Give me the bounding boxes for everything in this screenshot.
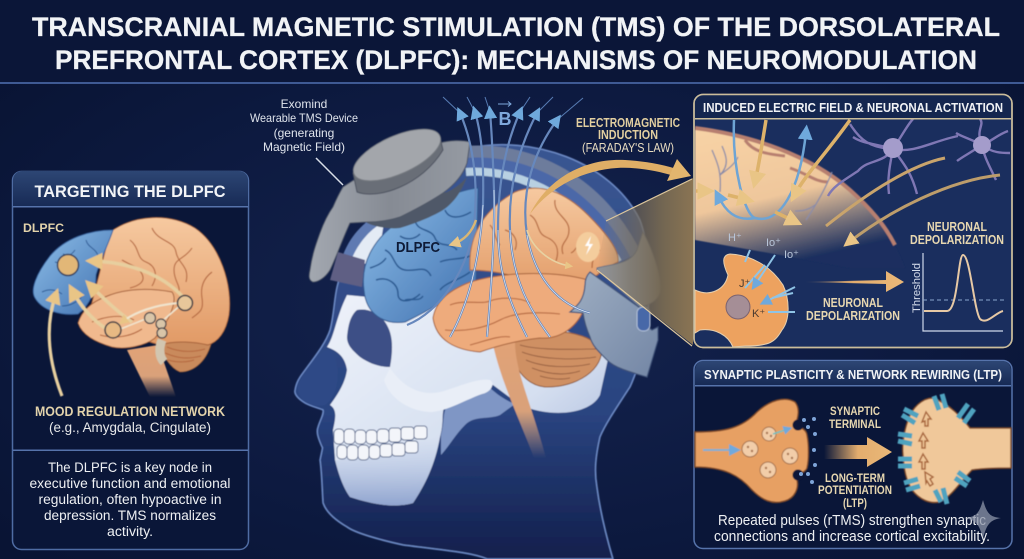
graph label: DEPOLARIZATION — [910, 233, 1004, 247]
device label: Wearable TMS Device — [250, 111, 358, 125]
device label — [250, 97, 358, 185]
action potential chart — [911, 253, 1004, 331]
network caption: (e.g., Amygdala, Cingulate) — [49, 420, 211, 435]
left brain illustration — [33, 218, 230, 397]
eye socket — [347, 310, 392, 367]
B vector label: B — [498, 109, 512, 129]
LTP arrow — [824, 437, 892, 467]
cell with ion channels: Io⁺ — [766, 237, 781, 249]
cortex section — [695, 128, 905, 268]
rTMS description: Repeated pulses (rTMS) strengthen synaptic — [718, 513, 986, 529]
title: PREFRONTAL CORTEX (DLPFC): MECHANISMS OF NEUROMODULATION — [55, 45, 977, 75]
rTMS description: connections and increase cortical excitability. — [714, 529, 990, 545]
synaptic terminal label: TERMINAL — [829, 419, 881, 431]
cell with ion channels: Io⁺ — [784, 249, 799, 261]
panel header — [13, 171, 248, 208]
network caption — [35, 404, 225, 435]
LTP label: LONG-TERM — [825, 473, 885, 485]
graph label: NEURONAL — [927, 220, 987, 234]
title: TRANSCRANIAL MAGNETIC STIMULATION (TMS) OF THE DORSOLATERAL — [32, 12, 1000, 42]
device label: Exomind — [281, 97, 327, 111]
device coil disk — [346, 119, 448, 194]
panel: targeting the DLPFC — [12, 171, 248, 550]
neurotransmitters — [799, 417, 817, 484]
helmet port — [637, 307, 650, 331]
presynaptic terminal — [695, 399, 808, 502]
electromagnetic induction label: (FARADAY'S LAW) — [582, 141, 674, 155]
action potential chart: Threshold — [911, 263, 923, 313]
neurons — [828, 119, 1010, 196]
electromagnetic induction label: ELECTROMAGNETIC — [576, 116, 680, 130]
panel header: TARGETING THE DLPFC — [34, 183, 226, 201]
blue DLPFC lobe — [363, 188, 478, 323]
DLPFC description: regulation, often hypoactive in — [38, 492, 222, 507]
graph label — [910, 220, 1004, 247]
panel header — [695, 361, 1011, 386]
nasal shadow — [298, 350, 338, 406]
helmet lower side piece — [570, 272, 658, 377]
cell with ion channels: H⁺ — [728, 232, 742, 244]
helmet back shell — [466, 160, 628, 262]
panel: synaptic plasticity — [694, 360, 1012, 548]
electromagnetic induction label: INDUCTION — [598, 128, 658, 142]
LTP label: POTENTIATION — [818, 485, 892, 497]
device label: Magnetic Field) — [263, 140, 345, 154]
field arrows — [696, 120, 1000, 243]
network nodes and arrows — [49, 254, 193, 396]
cell with ion channels: K⁺ — [752, 308, 765, 320]
sparkle watermark — [964, 500, 1001, 538]
induction cone — [597, 178, 693, 345]
arrow to DLPFC — [453, 220, 476, 244]
brainstem — [492, 340, 546, 458]
synaptic terminal label — [829, 406, 881, 431]
DLPFC description: activity. — [107, 524, 153, 539]
cerebellum — [510, 331, 602, 387]
skull — [327, 295, 610, 505]
panel: induced electric field and neuronal activation — [694, 94, 1012, 348]
synaptic terminal label: SYNAPTIC — [830, 406, 880, 418]
central head illustration — [295, 119, 660, 559]
postsynaptic spine — [898, 394, 1011, 504]
neuron bodies — [883, 136, 991, 158]
title — [0, 0, 1024, 84]
rTMS description — [714, 513, 990, 545]
cell depolarization label: DEPOLARIZATION — [806, 309, 900, 323]
cell with ion channels: J⁺ — [739, 278, 750, 290]
cell with ion channels — [695, 232, 799, 347]
DLPFC description: depression. TMS normalizes — [44, 508, 216, 523]
head silhouette — [295, 145, 649, 559]
temporal lobe — [433, 274, 588, 352]
receptors — [898, 394, 974, 504]
teeth — [334, 426, 427, 460]
helmet upper side piece — [597, 232, 660, 307]
center DLPFC label: DLPFC — [396, 239, 440, 256]
device base — [367, 177, 467, 228]
DLPFC description: executive function and emotional — [30, 476, 230, 491]
small arrow in cortex — [527, 230, 570, 266]
helmet inner band — [330, 212, 392, 287]
LTP label: (LTP) — [843, 498, 867, 510]
induction arrow — [530, 159, 691, 214]
orange upper lobe — [470, 188, 618, 295]
device label: (generating — [274, 126, 334, 140]
panel header — [695, 95, 1011, 120]
magnetic field lines — [407, 97, 590, 337]
cell depolarization label: NEURONAL — [823, 296, 883, 310]
mandible gap — [441, 388, 515, 455]
cheekbone — [384, 368, 492, 412]
helmet front arm and brim — [309, 141, 470, 282]
LTP label — [818, 473, 892, 510]
DLPFC label: DLPFC — [23, 221, 64, 235]
DLPFC description — [30, 460, 230, 539]
depolarization arrow — [803, 271, 904, 292]
network caption: MOOD REGULATION NETWORK — [35, 404, 225, 419]
DLPFC description: The DLPFC is a key node in — [48, 460, 212, 475]
cell depolarization label — [806, 296, 900, 323]
electromagnetic induction label — [576, 116, 680, 155]
lower jaw shading — [335, 437, 440, 505]
